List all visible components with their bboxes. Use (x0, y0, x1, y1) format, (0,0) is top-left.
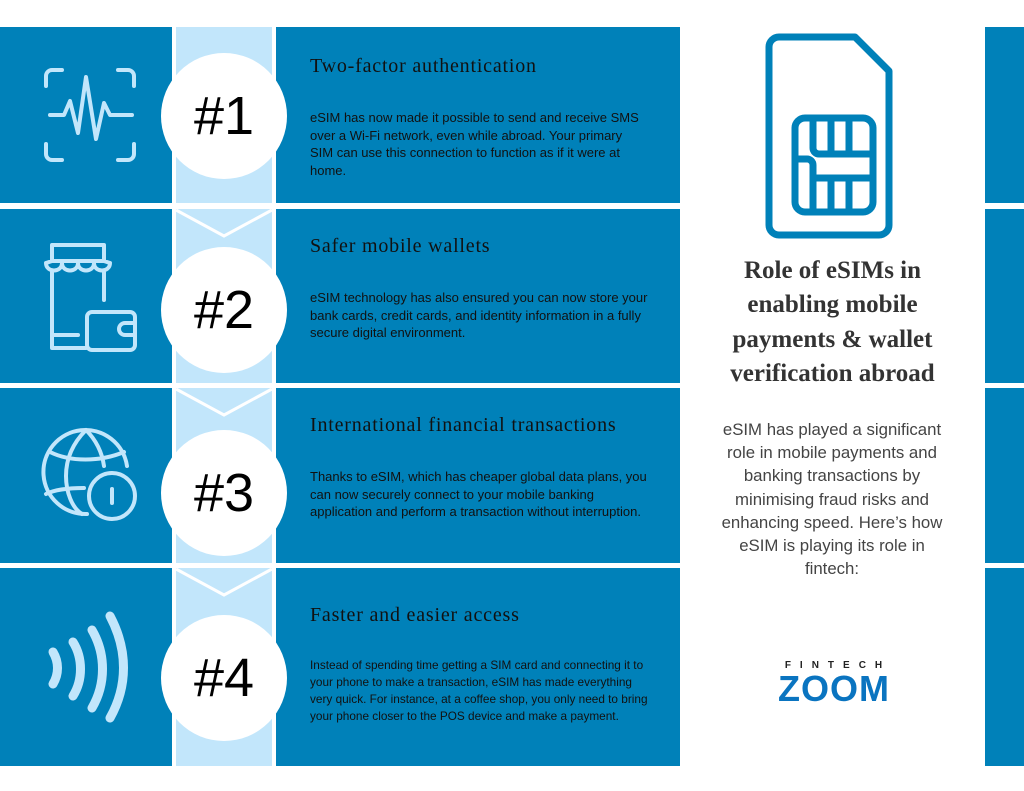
icon: contactless (48, 612, 128, 722)
intro text: eSIM has played a significant role in mobile payments and banking transactions by minimising fraud risks and enhancing speed. Here’s how eSIM is playing its role in fintech: (722, 420, 942, 578)
panel: row 1 (0, 27, 680, 203)
text 4: Instead of spending time getting a SIM card and connecting it to your phone to make a transaction, eSIM has made everything very quick. For instance, at a coffee shop, you only need to bring your phone closer to the POS device and make a payment. (310, 658, 648, 723)
text 3: Thanks to eSIM, which has cheaper global data plans, you can now securely connect to your mobile banking application and perform a transaction without interruption. (310, 469, 647, 519)
heading 3: International financial transactions (310, 414, 616, 436)
panel: row 4 (0, 568, 680, 766)
heading 4: Faster and easier access (310, 604, 520, 626)
right edge strip (985, 27, 1024, 766)
text 1: eSIM has now made it possible to send and receive SMS over a Wi-Fi network, even while abroad. Your primary SIM can use this connection to function as if it were at home. (310, 110, 639, 178)
#2 circle (161, 247, 287, 373)
#4 circle: #4 (194, 648, 254, 708)
#2 circle: #2 (194, 280, 254, 340)
icon: SIM card (766, 34, 892, 238)
icon: heartbeat scan (44, 68, 136, 162)
panel: row 2 (0, 209, 680, 383)
#4 circle (161, 615, 287, 741)
#1 circle (161, 53, 287, 179)
icon: shop wallet (44, 243, 137, 352)
logo: Fintech Zoom: ZOOM (778, 668, 890, 709)
heading 2: Safer mobile wallets (310, 235, 490, 257)
icon: globe info (41, 428, 137, 521)
title: Role of eSIMs in enabling mobile payments & wallet verification abroad (730, 257, 935, 387)
text 2: eSIM technology has also ensured you can now store your bank cards, credit cards, and identity information in a fully secure digital environment. (310, 290, 647, 340)
heading 1: Two-factor authentication (310, 55, 537, 77)
logo: Fintech Zoom: FINTECH (785, 660, 891, 671)
#3 circle (161, 430, 287, 556)
panel: row 3 (0, 388, 680, 563)
#1 circle: #1 (194, 86, 254, 146)
#3 circle: #3 (194, 463, 254, 523)
